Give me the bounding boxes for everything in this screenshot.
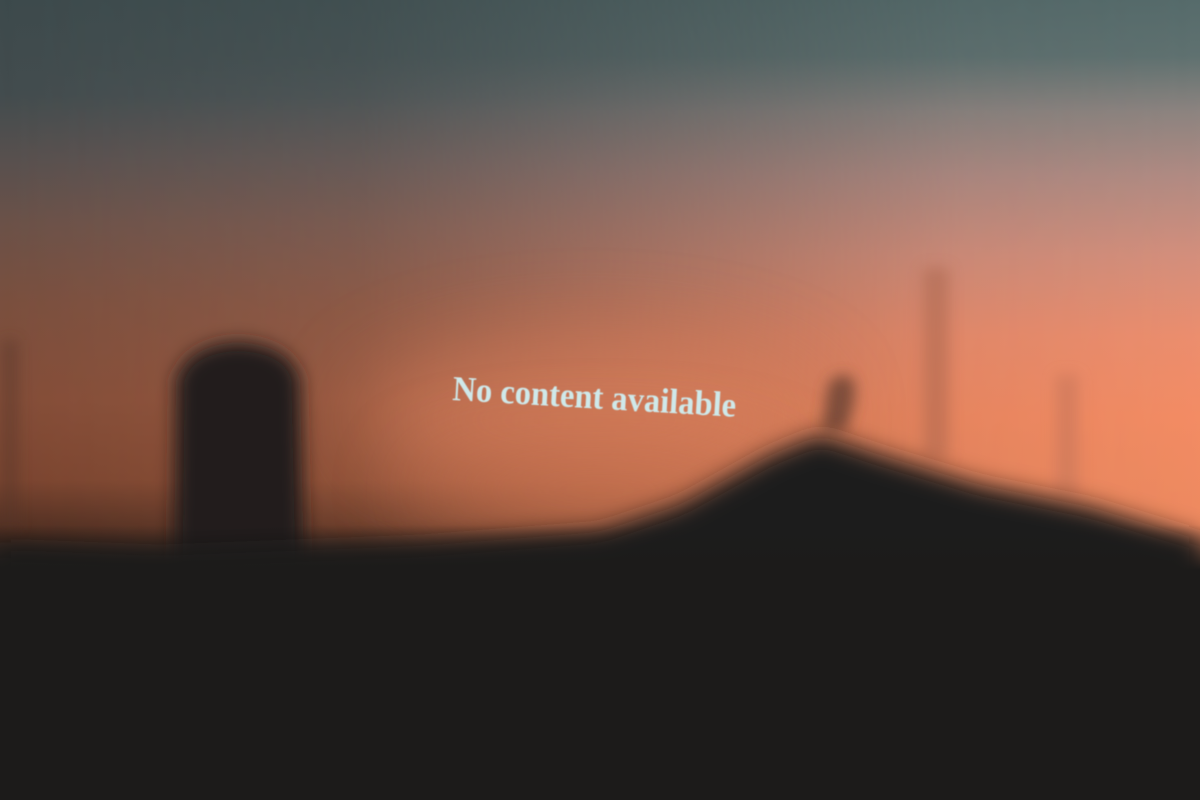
photo background: blurred sunset with silhouettes [0, 0, 1200, 566]
silhouette: faint antennas [2, 268, 1078, 530]
caption text: No content available [452, 369, 737, 425]
silhouette: water tower [174, 342, 304, 570]
silhouette: rooftop and ground [0, 435, 1200, 800]
sky gradient [0, 0, 1200, 566]
